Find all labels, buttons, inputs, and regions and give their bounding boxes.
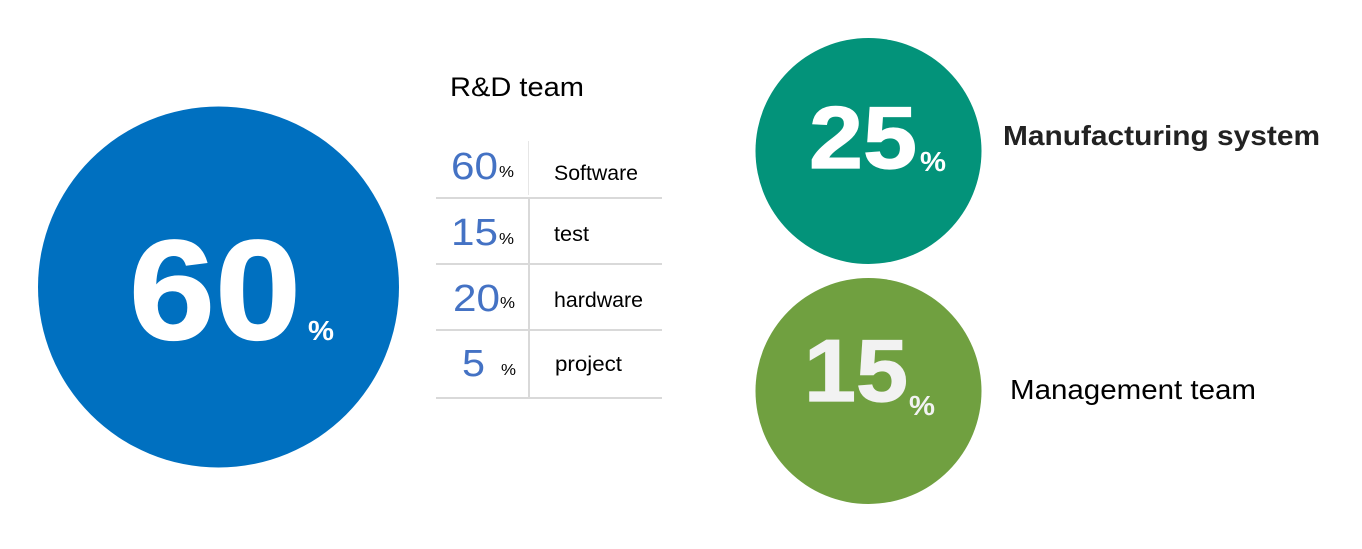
heading: R&D team: R&D team	[450, 72, 584, 102]
panel: 60 percent circle	[38, 106, 399, 468]
panel: 60 percent circle: 60	[129, 211, 301, 370]
panel: 15 percent circle: 15	[804, 321, 908, 420]
row: software: 60	[451, 146, 498, 188]
panel: 25 percent circle: 25	[809, 88, 917, 187]
panel: 25 percent circle: %	[920, 146, 946, 177]
panel: 60 percent circle: %	[308, 315, 334, 346]
label: manufacturing system: Manufacturing system	[1003, 120, 1320, 151]
row: test: %	[499, 231, 514, 248]
row: software	[451, 146, 638, 188]
row: project: 5	[462, 343, 485, 385]
row: test: test	[554, 223, 589, 246]
row: hardware	[453, 278, 643, 320]
panel: 15 percent circle: %	[909, 390, 935, 421]
row: hardware: %	[500, 295, 515, 312]
table: R&D breakdown	[436, 141, 662, 399]
panel: 25 percent circle	[756, 38, 982, 264]
row: hardware: 20	[453, 278, 500, 320]
label: management team: Management team	[1010, 374, 1256, 405]
panel: 15 percent circle	[756, 278, 982, 504]
row: project: %	[501, 362, 516, 379]
row: test: 15	[451, 212, 498, 254]
row: hardware: hardware	[554, 289, 643, 312]
row: test	[451, 212, 589, 254]
row: project: project	[555, 353, 622, 376]
row: software: %	[499, 164, 514, 181]
row: project	[462, 343, 622, 385]
row: software: Software	[554, 162, 638, 185]
